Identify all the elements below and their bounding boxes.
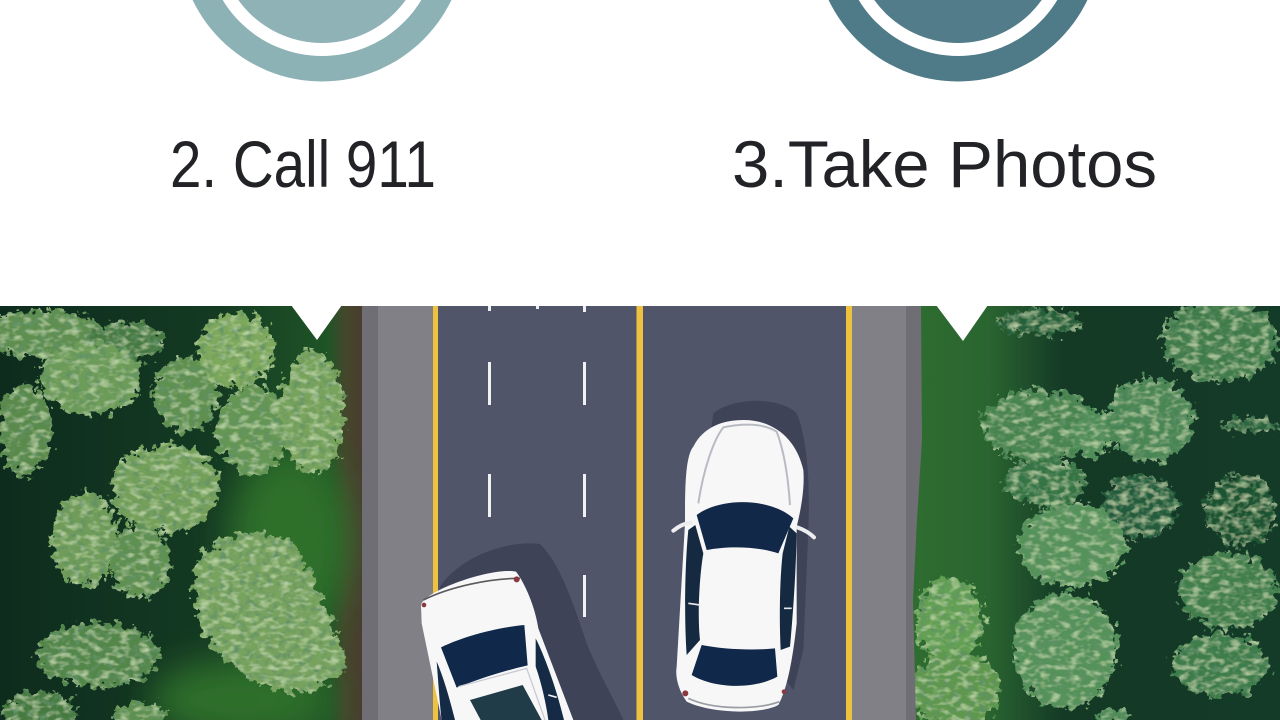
heading: step 2: 2. Call 911 [170, 127, 436, 201]
heading: step 3: 3.Take Photos [732, 127, 1157, 201]
icon: step 2 circle [178, 0, 466, 82]
notch: right pointer [936, 305, 988, 341]
notch: left pointer [291, 305, 342, 340]
panel: right forest [905, 298, 1280, 720]
icon: step 3 circle [814, 0, 1102, 82]
yellow edge lines [433, 306, 852, 720]
dashed lane markings [488, 306, 586, 720]
car: crashed car at lower left [421, 543, 623, 720]
road [362, 306, 922, 720]
panel: left forest [0, 306, 364, 720]
car: white car at right [673, 401, 814, 712]
